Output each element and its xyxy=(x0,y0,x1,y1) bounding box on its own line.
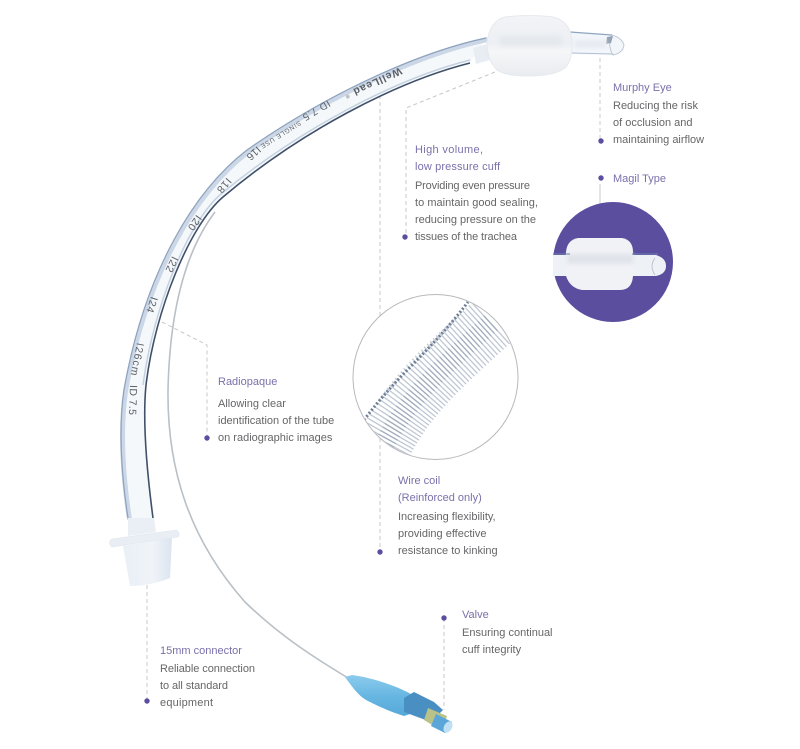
cuff xyxy=(487,16,572,76)
description: on radiographic images xyxy=(218,432,333,444)
description: equipment xyxy=(160,697,213,709)
tube markings: I16 xyxy=(244,144,263,163)
pilot line xyxy=(168,212,348,678)
tube markings: I22 xyxy=(163,254,180,274)
description xyxy=(218,398,334,444)
tube body xyxy=(121,38,486,518)
inner wall line xyxy=(145,63,470,518)
callout: valve xyxy=(441,609,553,656)
outer wall line xyxy=(121,38,486,518)
dot xyxy=(144,698,150,704)
panel: magil type detail xyxy=(553,202,673,322)
tube markings: SINGLE USE xyxy=(259,119,302,150)
description: reducing pressure on the xyxy=(415,214,536,226)
heading xyxy=(398,475,482,504)
tube markings: I24 xyxy=(143,295,160,314)
heading: (Reinforced only) xyxy=(398,492,482,504)
heading: low pressure cuff xyxy=(415,161,501,173)
valve xyxy=(345,675,454,734)
dot xyxy=(204,435,210,441)
description: tissues of the trachea xyxy=(415,231,518,243)
description: Allowing clear xyxy=(218,398,286,410)
callout: murphy eye xyxy=(598,82,704,146)
endotracheal tube xyxy=(110,16,624,734)
callout: wire coil xyxy=(377,475,498,557)
description: Ensuring continual xyxy=(462,627,553,639)
dot xyxy=(598,175,604,181)
cuff xyxy=(566,238,633,290)
inner wall shade xyxy=(143,60,470,385)
heading: Wire coil xyxy=(398,475,440,487)
description xyxy=(398,511,498,557)
dot xyxy=(377,549,383,555)
circle outline xyxy=(353,294,518,460)
tip xyxy=(570,32,624,55)
description: of occlusion and xyxy=(613,117,692,129)
tube markings: I18 xyxy=(214,175,234,195)
description xyxy=(160,663,255,709)
tube markings: ID 7.5 xyxy=(300,97,332,122)
dot xyxy=(598,138,604,144)
description xyxy=(462,627,553,656)
purple circle xyxy=(553,202,673,322)
heading xyxy=(415,144,501,173)
description: Reliable connection xyxy=(160,663,255,675)
description: Reducing the risk xyxy=(613,100,698,112)
callout: radiopaque xyxy=(204,376,334,444)
tube markings: ID 7.5 xyxy=(126,385,139,415)
heading: Murphy Eye xyxy=(613,82,672,94)
heading: 15mm connector xyxy=(160,645,242,657)
heading: Magil Type xyxy=(613,173,666,185)
leader lines xyxy=(147,58,600,710)
tube markings: I20 xyxy=(185,213,204,233)
dot xyxy=(441,615,447,621)
panel: wire coil detail xyxy=(353,294,518,460)
tube markings xyxy=(126,65,404,415)
coil xyxy=(364,302,492,443)
callout: high volume cuff xyxy=(402,144,538,243)
description: resistance to kinking xyxy=(398,545,498,557)
description: Increasing flexibility, xyxy=(398,511,496,523)
wall line xyxy=(553,253,658,255)
15mm connector part xyxy=(110,518,179,586)
description: to maintain good sealing, xyxy=(415,197,538,209)
callout: 15mm connector xyxy=(144,645,255,709)
heading: Valve xyxy=(462,609,489,621)
heading: Radiopaque xyxy=(218,376,277,388)
tip ring xyxy=(652,258,655,275)
description xyxy=(415,180,538,243)
tube markings: ® xyxy=(344,92,351,100)
tube markings: WellLead xyxy=(351,65,404,97)
callout: magil type xyxy=(598,173,666,185)
tube markings: I26cm xyxy=(128,342,146,377)
description: providing effective xyxy=(398,528,486,540)
band xyxy=(567,254,633,264)
description xyxy=(613,100,704,146)
heading: High volume, xyxy=(415,144,483,156)
dot xyxy=(402,234,408,240)
description: Providing even pressure xyxy=(415,180,530,192)
outer wall highlight xyxy=(123,40,488,520)
description: to all standard xyxy=(160,680,228,692)
neck ring xyxy=(473,43,490,64)
description: maintaining airflow xyxy=(613,134,704,146)
description: identification of the tube xyxy=(218,415,334,427)
description: cuff integrity xyxy=(462,644,522,656)
tube xyxy=(553,255,666,276)
